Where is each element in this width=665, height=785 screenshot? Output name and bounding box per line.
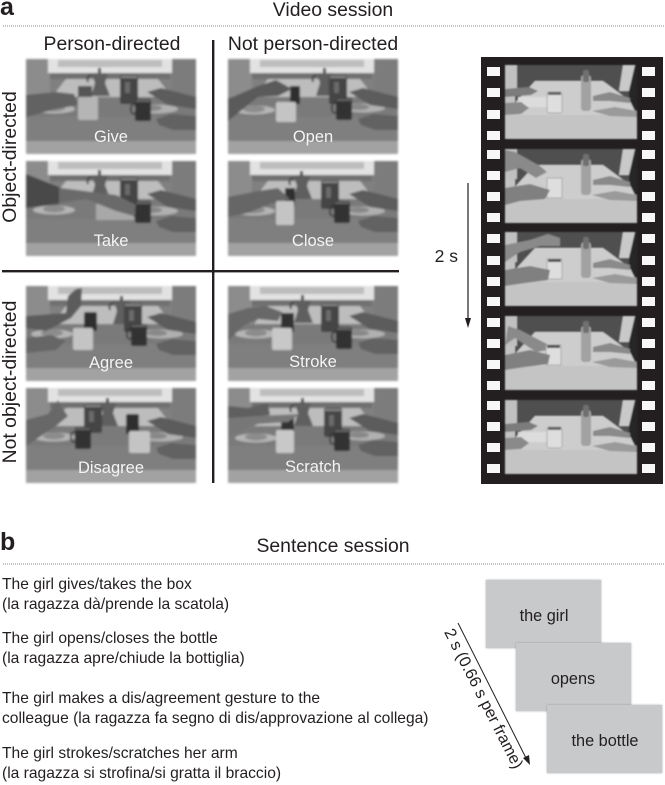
timing arrow: 2 s bbox=[435, 183, 471, 328]
sentence: gives/takes: The girl gives/takes the box bbox=[2, 576, 192, 593]
photo: agree bbox=[26, 286, 196, 381]
sentence: agreement gesture: The girl makes a dis/agreement gesture to the bbox=[2, 690, 320, 707]
photo: take bbox=[26, 161, 196, 256]
stimulus card: the girl bbox=[486, 580, 601, 648]
photo: open: Open bbox=[293, 128, 333, 146]
photo: open bbox=[228, 59, 398, 154]
sentence: agreement gesture: colleague (la ragazza fa segno di dis/approvazione al collega) bbox=[2, 710, 428, 727]
timing arrow: 2 s per frame: 2 s (0.66 s per frame) bbox=[440, 626, 527, 772]
column heading: person-directed: Person-directed bbox=[44, 33, 180, 55]
stimulus card: opens: opens bbox=[551, 670, 595, 688]
photo: scratch: Scratch bbox=[285, 458, 341, 476]
sentence: opens/closes: (la ragazza apre/chiude la bottiglia) bbox=[2, 650, 245, 667]
photo: take: Take bbox=[94, 232, 128, 250]
photo: scratch bbox=[228, 388, 398, 483]
sentence: strokes/scratches: The girl strokes/scratches her arm bbox=[2, 745, 238, 762]
photo: disagree bbox=[26, 388, 196, 483]
photo: stroke: Stroke bbox=[289, 353, 337, 371]
panel letter b: b bbox=[0, 528, 15, 556]
stimulus card: opens bbox=[516, 643, 631, 711]
photo: stroke bbox=[228, 286, 398, 381]
stimulus card: the girl: the girl bbox=[520, 607, 568, 625]
film perforations bbox=[487, 67, 655, 473]
photo: close bbox=[228, 161, 398, 256]
film strip bbox=[481, 57, 663, 484]
timing arrow: 2 s: 2 s bbox=[435, 246, 458, 266]
column heading: not person-directed: Not person-directed bbox=[228, 33, 398, 55]
photo: disagree: Disagree bbox=[78, 459, 144, 477]
stimulus card: the bottle: the bottle bbox=[572, 732, 638, 750]
heading: sentence session: Sentence session bbox=[256, 535, 410, 557]
photo: agree: Agree bbox=[89, 354, 133, 372]
photo: close: Close bbox=[292, 232, 334, 250]
photo: give: Give bbox=[94, 128, 128, 146]
quadrant horizontal axis bbox=[2, 270, 399, 272]
sentence: opens/closes: The girl opens/closes the bottle bbox=[2, 630, 218, 647]
photo: give bbox=[26, 59, 196, 154]
quadrant vertical axis bbox=[212, 40, 214, 483]
sentence: strokes/scratches: (la ragazza si strofina/si gratta il braccio) bbox=[2, 765, 281, 782]
sentence: gives/takes: (la ragazza dà/prende la scatola) bbox=[2, 596, 229, 613]
stimulus card: the bottle bbox=[547, 705, 662, 773]
